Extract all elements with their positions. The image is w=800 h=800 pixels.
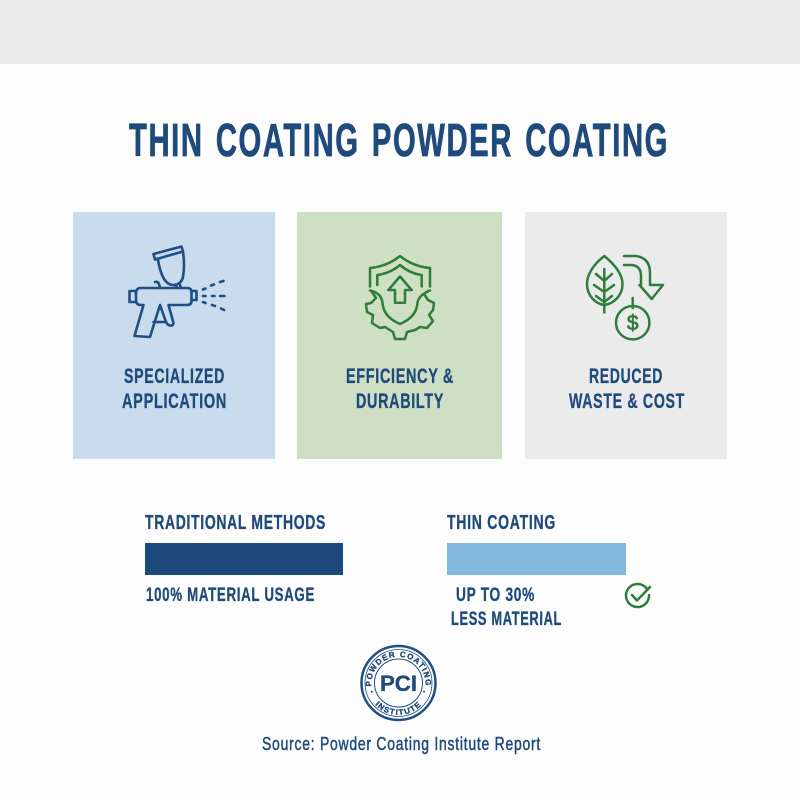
label: efficiency and durability: DURABILTY: [356, 390, 444, 413]
label: specialized application: APPLICATION: [122, 390, 227, 413]
label: reduced waste and cost: [569, 365, 685, 413]
comparison: traditional methods: 100% MATERIAL USAGE: [146, 584, 315, 606]
label: reduced waste and cost: REDUCED: [589, 365, 663, 388]
logo: PCI seal: PCI: [380, 671, 417, 696]
logo: PCI seal: [360, 644, 437, 722]
panel: efficiency and durability: [297, 212, 502, 459]
label: reduced waste and cost: WASTE & COST: [569, 390, 685, 413]
comparison: thin coating: THIN COATING: [447, 512, 556, 534]
icon: spray gun: [130, 246, 224, 337]
comparison: traditional methods: [145, 512, 343, 606]
icon: shield and gear: [366, 256, 434, 339]
comparison: thin coating: [447, 512, 650, 630]
label: efficiency and durability: EFFICIENCY &: [346, 365, 454, 388]
icon: check mark: [626, 584, 650, 607]
comparison: thin coating: LESS MATERIAL: [451, 608, 562, 630]
icon: dollar sign: $: [627, 312, 639, 335]
comparison: thin coating: UP TO 30%: [456, 584, 535, 606]
comparison: traditional methods: TRADITIONAL METHODS: [145, 512, 326, 534]
panel: reduced waste and cost: [525, 212, 727, 459]
label: specialized application: SPECIALIZED: [124, 365, 225, 388]
panel: specialized application: [73, 212, 275, 459]
label: specialized application: [122, 365, 227, 413]
logo: PCI seal: INSTITUTE: [375, 700, 422, 716]
logo: PCI seal: POWDER COATING: [366, 651, 432, 686]
top band: [0, 0, 800, 64]
icon: leaf, arrow and dollar coin: [587, 256, 663, 339]
source: Source: Powder Coating Institute Report: [262, 733, 541, 754]
label: efficiency and durability: [346, 365, 454, 413]
